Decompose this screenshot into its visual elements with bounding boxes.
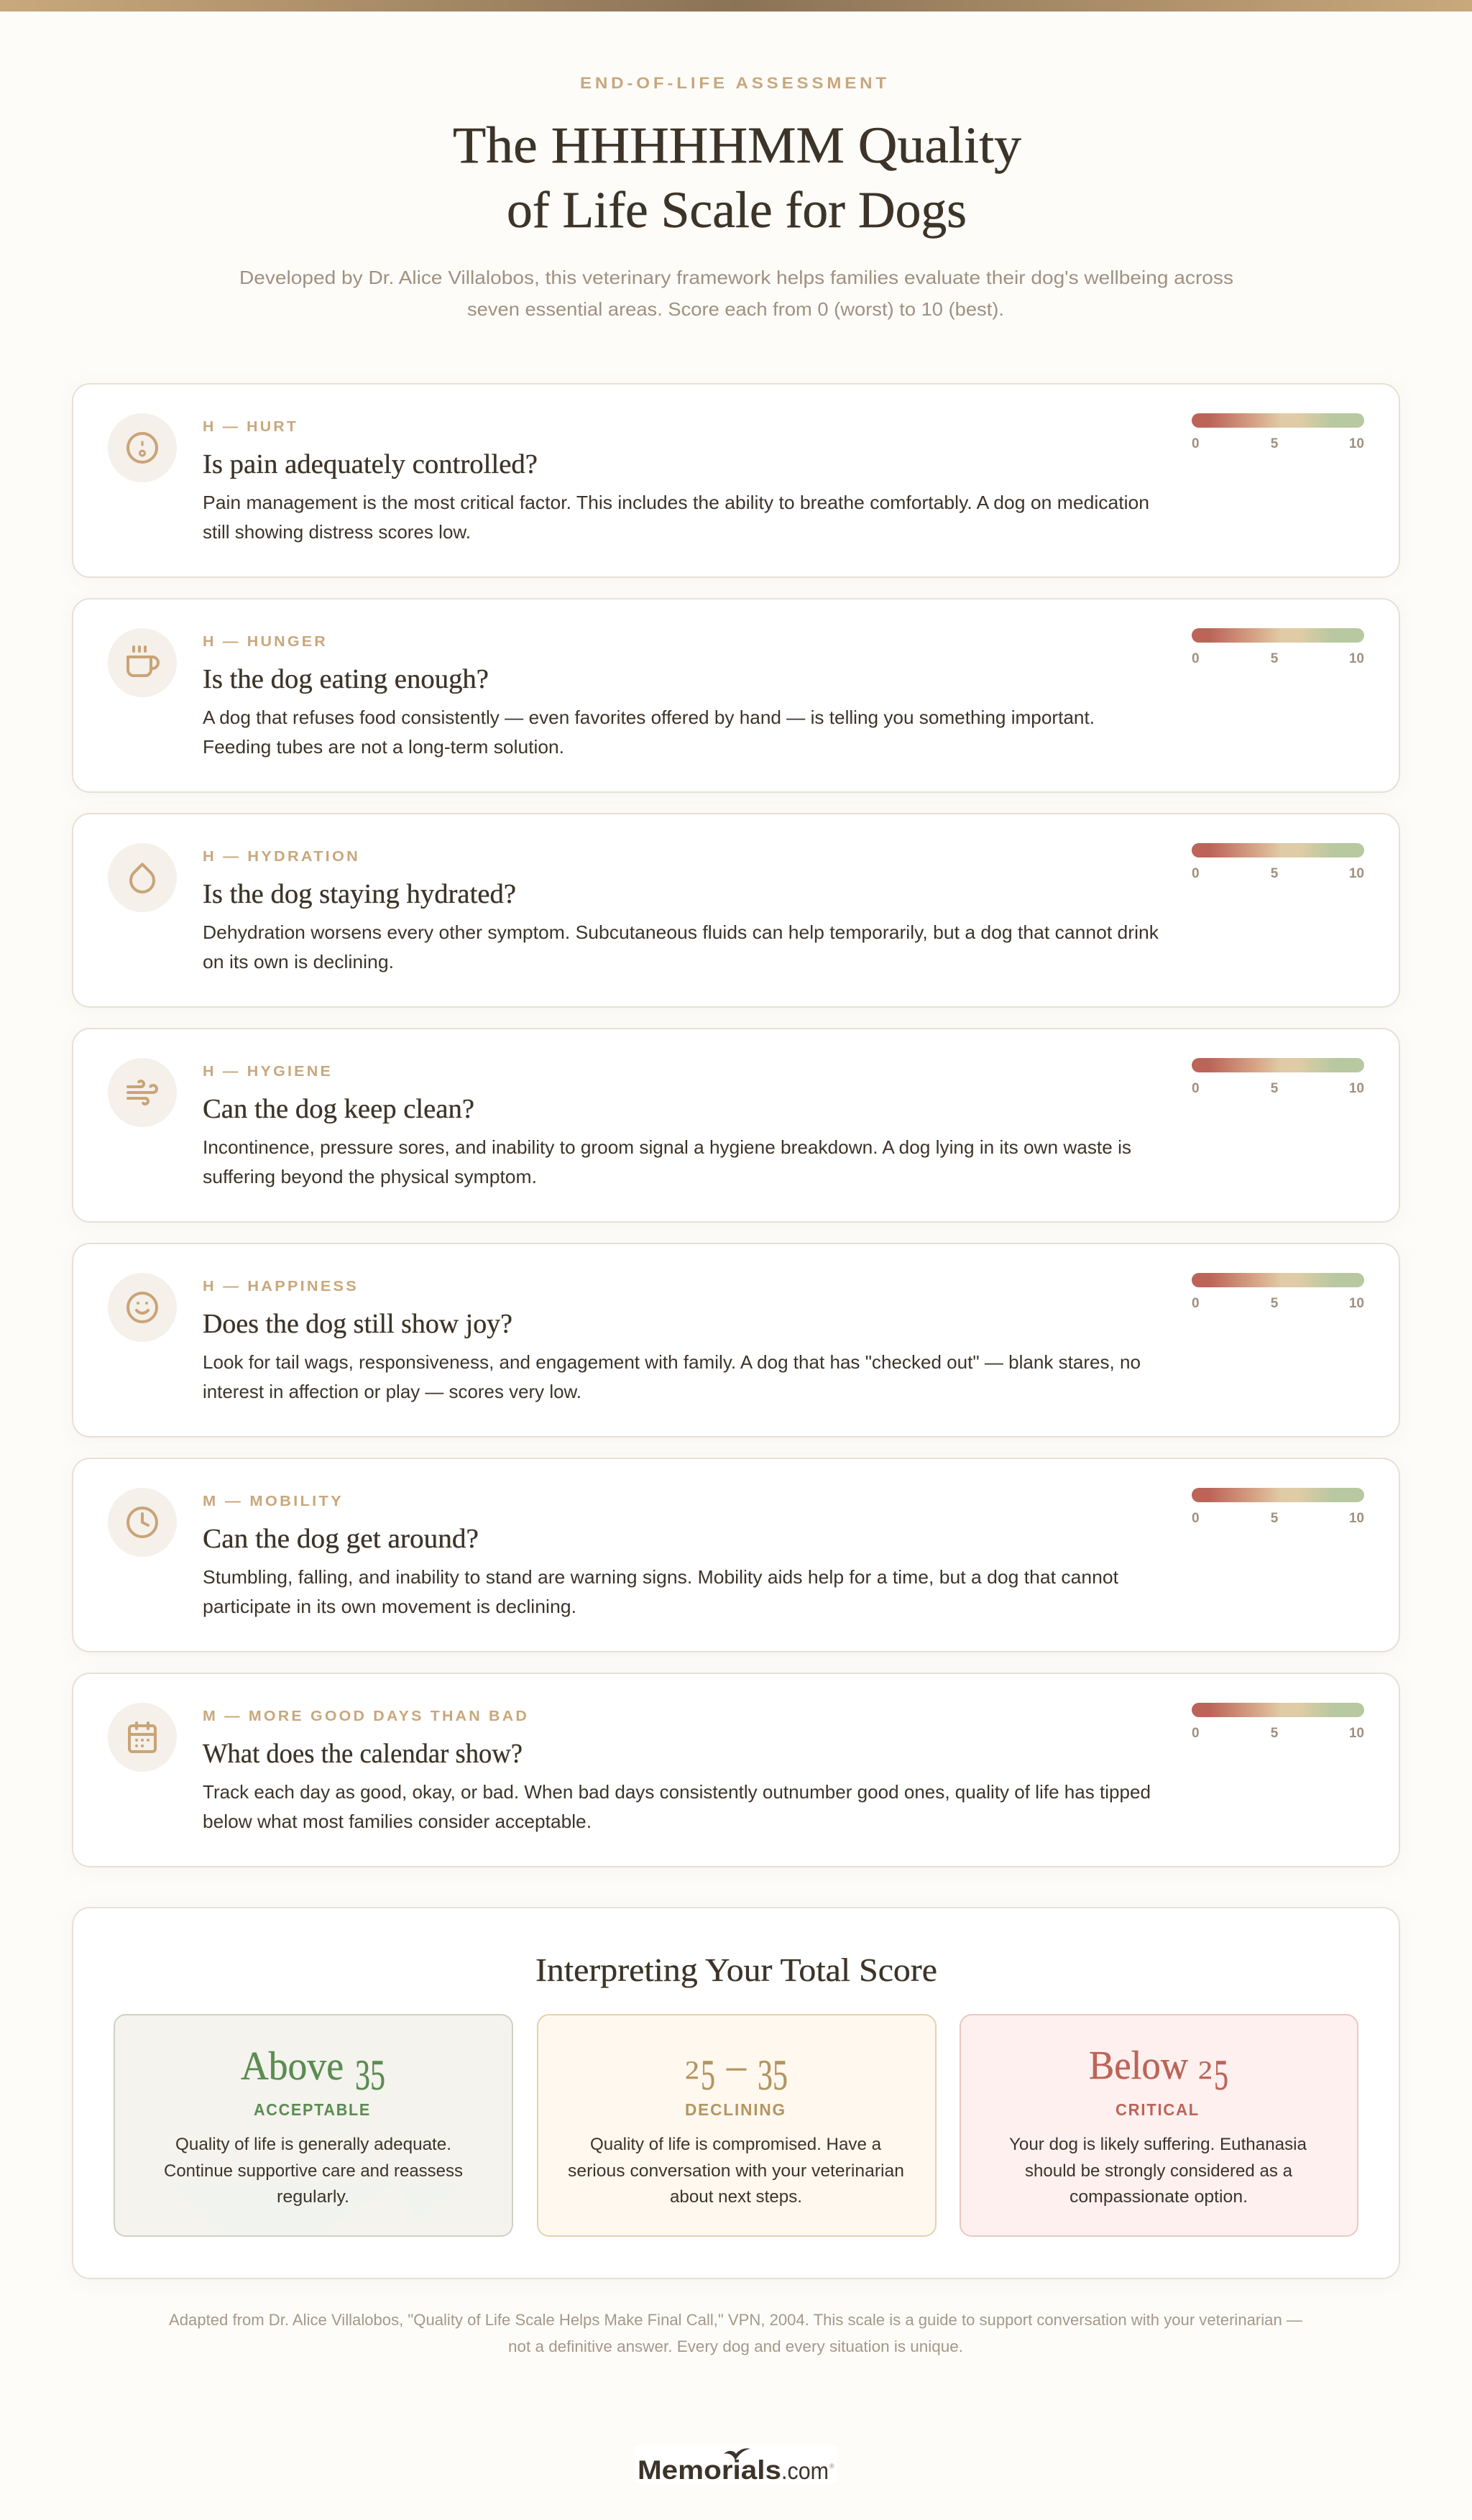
description: should be strongly considered as a — [1025, 2161, 1293, 2181]
icon: wind — [108, 1058, 177, 1127]
range: 5 — [701, 2051, 715, 2099]
score scale: 5 — [1271, 651, 1279, 666]
section heading: Interpreting Your Total Score — [535, 1951, 937, 1988]
score card: above 35 — [114, 2015, 512, 2236]
score scale: 10 — [1349, 1726, 1364, 1741]
score scale — [1192, 1273, 1364, 1311]
card background — [114, 2015, 512, 2236]
icon: pain indicator — [108, 413, 177, 482]
panel: hunger — [73, 599, 1399, 792]
description: Quality of life is compromised. Have a — [590, 2135, 882, 2154]
score scale: 0 — [1192, 651, 1200, 666]
description — [203, 707, 1095, 758]
title: of Life Scale for Dogs — [507, 181, 967, 239]
range: – — [726, 2043, 747, 2088]
description: suffering beyond the physical symptom. — [203, 1166, 537, 1187]
description: Track each day as good, okay, or bad. When bad days consistently outnumber good ones, quality of life has tipped — [203, 1781, 1151, 1803]
description: Dehydration worsens every other symptom. Subcutaneous fluids can help temporarily, but a dog that cannot drink — [203, 921, 1159, 943]
intro text: Developed by Dr. Alice Villalobos, this veterinary framework helps families evaluate their dog's wellbeing across — [239, 267, 1233, 288]
panel: hurt — [73, 384, 1399, 577]
panel background — [73, 1908, 1399, 2278]
category label: H — HUNGER — [203, 634, 328, 650]
description: below what most families consider acceptable. — [203, 1811, 592, 1832]
question: Does the dog still show joy? — [203, 1309, 512, 1339]
header — [239, 74, 1233, 320]
icon: coffee cup — [108, 628, 177, 697]
range: 2 — [1198, 2056, 1213, 2084]
score scale: 10 — [1349, 1081, 1364, 1096]
score scale: 5 — [1271, 1081, 1279, 1096]
range: 5 — [1214, 2051, 1228, 2099]
description — [203, 1566, 1119, 1617]
footnote: Adapted from Dr. Alice Villalobos, "Quality of Life Scale Helps Make Final Call," VPN, 2004. This scale is a guide to support conversation with your veterinarian — — [169, 2311, 1302, 2329]
description — [164, 2135, 463, 2207]
score scale: 5 — [1271, 1511, 1279, 1526]
description: Feeding tubes are not a long-term solution. — [203, 736, 564, 758]
score scale: 10 — [1349, 1511, 1364, 1526]
description: about next steps. — [670, 2187, 802, 2207]
range — [1089, 2043, 1228, 2099]
description: Continue supportive care and reassess — [164, 2161, 463, 2181]
score scale: 5 — [1271, 1296, 1279, 1311]
range — [685, 2043, 788, 2099]
card background — [73, 384, 1399, 577]
description: Stumbling, falling, and inability to stand are warning signs. Mobility aids help for a time, but a dog that cannot — [203, 1566, 1119, 1588]
description: still showing distress scores low. — [203, 521, 471, 543]
description: regularly. — [277, 2187, 349, 2207]
score scale: 0 — [1192, 866, 1200, 881]
panel: hydration — [73, 814, 1399, 1007]
description — [203, 921, 1159, 972]
icon: calendar — [108, 1703, 177, 1772]
eyebrow: END-OF-LIFE ASSESSMENT — [580, 74, 890, 92]
description: Your dog is likely suffering. Euthanasia — [1009, 2135, 1307, 2154]
score scale: 10 — [1349, 866, 1364, 881]
score scale: 5 — [1271, 436, 1279, 451]
logo: Memorials.com — [635, 2446, 837, 2485]
card background — [73, 599, 1399, 792]
score scale: 0 — [1192, 436, 1200, 451]
description: Pain management is the most critical factor. This includes the ability to breathe comfortably. A dog on medication — [203, 492, 1149, 513]
intro text — [239, 267, 1233, 320]
category label: M — MORE GOOD DAYS THAN BAD — [203, 1709, 529, 1724]
panel: happiness — [73, 1243, 1399, 1437]
range: 35 — [355, 2051, 385, 2099]
question: Can the dog keep clean? — [203, 1094, 474, 1124]
score scale: 10 — [1349, 436, 1364, 451]
card background — [538, 2015, 936, 2236]
score scale — [1192, 1488, 1364, 1526]
panel: mobility — [73, 1458, 1399, 1652]
question: Is pain adequately controlled? — [203, 449, 538, 479]
description: participate in its own movement is declining. — [203, 1596, 576, 1617]
score scale: 5 — [1271, 866, 1279, 881]
title — [453, 116, 1021, 239]
logo: Memorials.com: Memorials — [638, 2455, 781, 2485]
score scale: 5 — [1271, 1726, 1279, 1741]
range — [241, 2044, 385, 2099]
range: Below — [1089, 2043, 1189, 2088]
description — [203, 1136, 1131, 1187]
panel: more good days than bad — [73, 1673, 1399, 1867]
card background — [73, 1458, 1399, 1652]
card background — [73, 814, 1399, 1007]
description: interest in affection or play — scores very low. — [203, 1381, 581, 1402]
status: CRITICAL — [1116, 2100, 1200, 2119]
score scale — [1192, 628, 1364, 666]
score card: below 25 — [960, 2015, 1358, 2236]
logo: Memorials.com: ® — [829, 2462, 834, 2470]
category label: H — HURT — [203, 419, 298, 435]
description: Look for tail wags, responsiveness, and engagement with family. A dog that has "checked out" — blank stares, no — [203, 1351, 1141, 1373]
score card: 25 to 35 — [538, 2015, 936, 2236]
score scale: 0 — [1192, 1296, 1200, 1311]
score scale — [1192, 843, 1364, 881]
description: Incontinence, pressure sores, and inability to groom signal a hygiene breakdown. A dog lying in its own waste is — [203, 1136, 1131, 1158]
category label: H — HYGIENE — [203, 1064, 333, 1080]
question: What does the calendar show? — [203, 1739, 523, 1769]
title: The HHHHHMM Quality — [453, 116, 1021, 174]
category label: H — HAPPINESS — [203, 1279, 359, 1295]
card background — [73, 1243, 1399, 1437]
intro text: seven essential areas. Score each from 0 (worst) to 10 (best). — [467, 298, 1004, 320]
score scale: 0 — [1192, 1081, 1200, 1096]
score scale — [1192, 1703, 1364, 1741]
status: DECLINING — [685, 2100, 786, 2119]
icon: water drop — [108, 843, 177, 912]
card background — [960, 2015, 1358, 2236]
top gradient bar — [0, 0, 1472, 12]
range: 2 — [685, 2056, 699, 2084]
panel: interpreting your total score — [73, 1908, 1399, 2278]
description — [203, 492, 1149, 543]
status: ACCEPTABLE — [254, 2100, 371, 2119]
score scale: 0 — [1192, 1511, 1200, 1526]
footnote: not a definitive answer. Every dog and every situation is unique. — [508, 2337, 963, 2355]
score scale: 10 — [1349, 1296, 1364, 1311]
description: A dog that refuses food consistently — even favorites offered by hand — is telling you something important. — [203, 707, 1095, 728]
category label: H — HYDRATION — [203, 849, 360, 865]
footnote — [169, 2311, 1302, 2355]
range: Above — [241, 2044, 344, 2089]
panel: hygiene — [73, 1029, 1399, 1222]
score scale: 0 — [1192, 1726, 1200, 1741]
description — [203, 1781, 1151, 1832]
score scale: 10 — [1349, 651, 1364, 666]
card background — [73, 1673, 1399, 1867]
description: on its own is declining. — [203, 951, 394, 972]
logo: Memorials.com: .com — [781, 2457, 829, 2484]
score scale — [1192, 1058, 1364, 1096]
description: Quality of life is generally adequate. — [175, 2135, 451, 2154]
card background — [73, 1029, 1399, 1222]
question: Is the dog eating enough? — [203, 664, 489, 694]
question: Is the dog staying hydrated? — [203, 879, 516, 909]
description: serious conversation with your veterinarian — [568, 2161, 904, 2181]
category label: M — MOBILITY — [203, 1494, 344, 1509]
description — [203, 1351, 1141, 1402]
icon: smiling face — [108, 1273, 177, 1342]
description: compassionate option. — [1070, 2187, 1248, 2207]
question: Can the dog get around? — [203, 1524, 479, 1554]
range: 35 — [758, 2051, 788, 2099]
description — [1009, 2135, 1307, 2207]
score scale — [1192, 413, 1364, 451]
description — [568, 2135, 904, 2207]
icon: clock — [108, 1488, 177, 1557]
